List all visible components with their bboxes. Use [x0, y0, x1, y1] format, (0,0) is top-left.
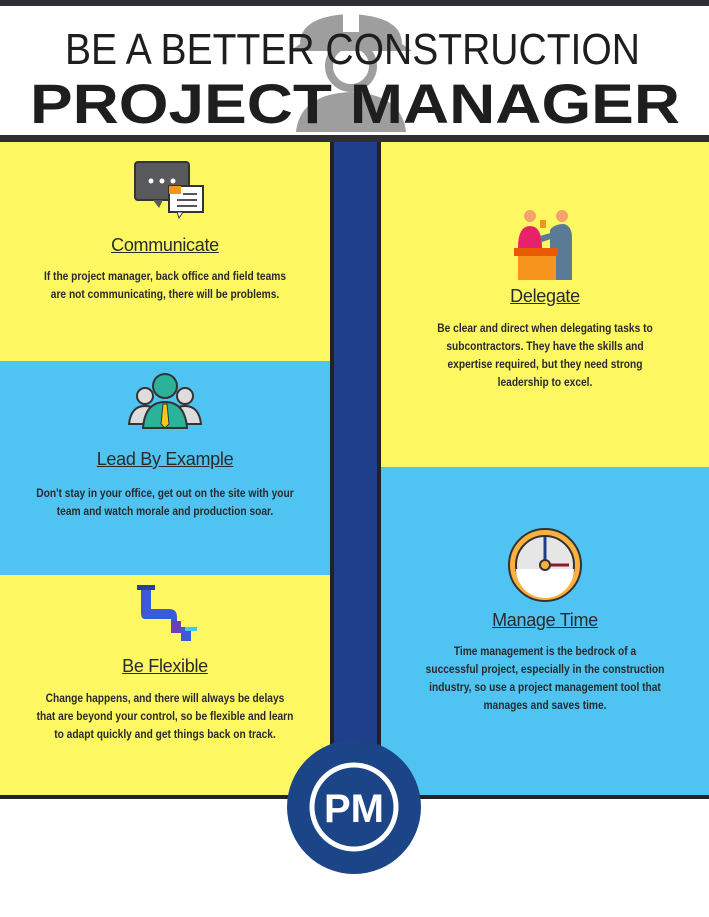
icon: pipe — [137, 585, 197, 641]
icon: delegate people — [514, 210, 572, 280]
panel: communicate — [44, 161, 286, 301]
heading: communicate: Communicate — [111, 235, 219, 255]
heading: lead by example: Lead By Example — [97, 449, 233, 469]
text: manage time: successful project, especially in the construction — [426, 662, 664, 676]
header with title — [30, 14, 680, 135]
text: lead by example: Don't stay in your office, get out on the site with your — [36, 486, 294, 500]
title: PROJECT MANAGER — [30, 72, 680, 135]
title: BE A BETTER CONSTRUCTION — [65, 25, 640, 74]
icon: chat bubbles — [134, 161, 204, 219]
text: be flexible: Change happens, and there will always be delays — [46, 691, 284, 705]
text: delegate — [437, 321, 653, 389]
panel: be flexible — [36, 585, 293, 741]
text: delegate: subcontractors. They have the skills and — [446, 339, 644, 353]
icon: clock — [508, 528, 582, 602]
text: communicate: If the project manager, back office and field teams — [44, 269, 286, 283]
heading: be flexible: Be Flexible — [122, 656, 208, 676]
text: delegate: expertise required, but they need strong — [448, 357, 642, 371]
text: be flexible: to adapt quickly and get things back on track. — [54, 727, 276, 741]
heading: manage time: Manage Time — [492, 610, 598, 630]
top bar — [0, 0, 709, 6]
text: communicate: are not communicating, there will be problems. — [51, 287, 279, 301]
text: manage time: Time management is the bedrock of a — [454, 644, 636, 658]
panel backgrounds — [0, 142, 709, 795]
text: be flexible — [36, 691, 293, 741]
text: delegate: leadership to excel. — [498, 375, 592, 389]
icon: team leader — [128, 373, 202, 429]
text: lead by example — [36, 486, 294, 518]
panel: lead by example — [36, 373, 294, 518]
title — [30, 25, 680, 135]
panel: delegate — [437, 210, 653, 389]
logo: PM badge: PM — [324, 787, 384, 831]
heading: delegate: Delegate — [510, 286, 580, 306]
text: lead by example: team and watch morale and production soar. — [57, 504, 273, 518]
text: manage time — [426, 644, 664, 712]
logo: PM badge — [287, 743, 421, 874]
text: manage time: industry, so use a project management tool that — [429, 680, 661, 694]
icon: worker helmet — [290, 8, 412, 132]
panel: manage time — [426, 528, 664, 712]
header bottom bar — [0, 135, 709, 142]
text: delegate: Be clear and direct when delegating tasks to — [437, 321, 653, 335]
text: manage time: manages and saves time. — [483, 698, 607, 712]
text: communicate — [44, 269, 286, 301]
text: be flexible: that are beyond your control, so be flexible and learn — [37, 709, 293, 723]
